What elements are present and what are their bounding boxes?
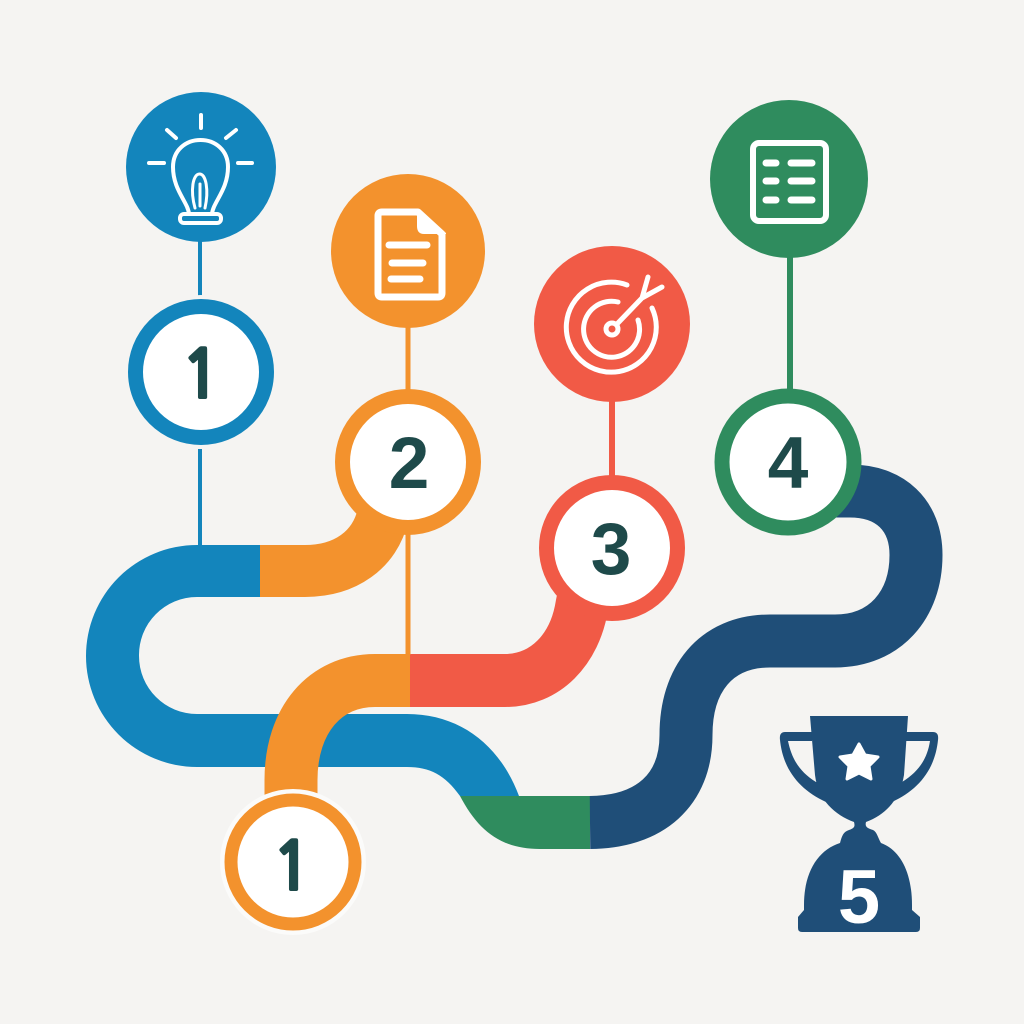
step 3 marker [546,482,678,614]
connector: green [787,256,793,392]
step 5 trophy [780,716,938,940]
road segment: blue [86,545,519,796]
trophy cup and base [798,716,920,932]
winding road path [86,480,916,849]
step 1 marker [124,295,278,449]
start marker: 1 [272,834,312,900]
trophy star [840,744,878,779]
connector: orange [406,325,410,655]
road segment: green [460,796,590,849]
road segment: navy [590,491,916,822]
connector: red [609,400,615,477]
trophy number: 5 [838,855,880,940]
trophy handles [780,732,938,802]
step 4 marker: 4 [768,423,809,504]
road segment: orange upper [260,480,392,571]
step 1 marker: 1 [181,342,221,408]
step 4 icon: checklist [710,100,868,258]
step 1 icon: light bulb [126,92,276,242]
road segment: orange lower [291,680,410,810]
step 2 marker [342,396,474,528]
connector lines [200,240,790,655]
step 3 marker: 3 [591,509,631,590]
road segment: red [410,565,590,680]
step 3 icon: target [534,246,690,402]
step 2 icon: document [331,174,485,328]
connector: blue [198,240,202,546]
step 4 marker [722,396,854,528]
start marker [220,789,366,935]
step 2 marker: 2 [389,423,429,504]
